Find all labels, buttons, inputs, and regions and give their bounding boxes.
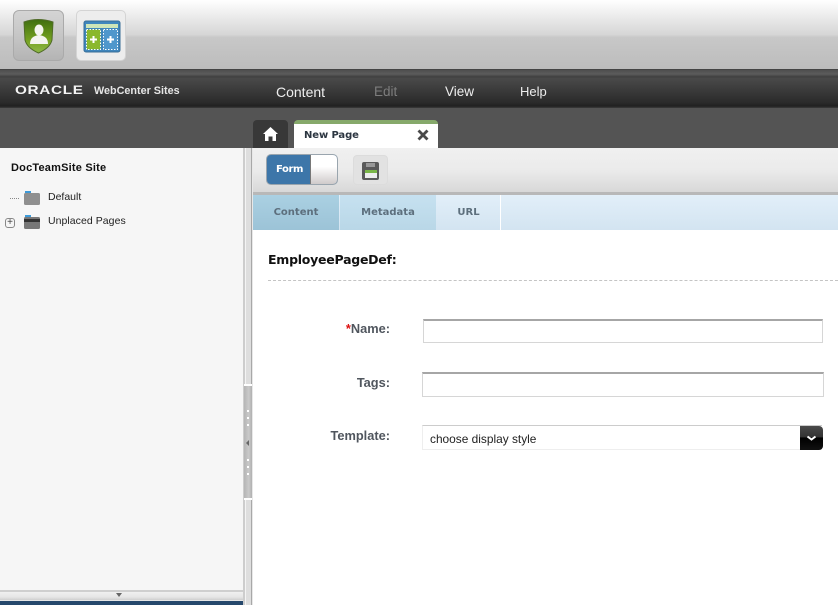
input: Tags (422, 372, 824, 397)
tab: Content: Content (274, 207, 318, 218)
tab bar (253, 192, 838, 231)
label: Template: Template: (330, 428, 390, 443)
icon: user shield button (13, 10, 64, 61)
menu bar (0, 69, 838, 108)
icon: dropdown button (800, 426, 823, 450)
menu: View: View (445, 84, 474, 99)
divider (268, 280, 838, 281)
toggle knob (310, 155, 337, 184)
tree item: Default: Default (48, 191, 81, 203)
tree item: Unplaced Pages (5, 215, 126, 229)
tab title: New Page (304, 130, 359, 141)
logo: Oracle: ORACLE (15, 85, 84, 97)
splitter (243, 148, 253, 605)
tab strip (0, 108, 838, 148)
icon: save button (353, 155, 388, 185)
toggle: Form: Form (276, 164, 303, 175)
tab: Metadata: Metadata (361, 207, 415, 218)
icon: expand (5, 218, 15, 228)
product name: WebCenter Sites (94, 85, 180, 97)
menu: Content: Content (276, 84, 325, 100)
select: Template: choose display style (430, 432, 536, 446)
tree item: Default (10, 191, 82, 205)
icon: expand: + (7, 217, 13, 228)
menu: Edit: Edit (374, 84, 397, 99)
input: Name (423, 319, 823, 343)
tab: URL (437, 195, 501, 230)
select: Template (422, 425, 822, 450)
toggle: Form (266, 154, 338, 185)
tab: Metadata (340, 195, 436, 230)
icon: open folder (24, 215, 40, 229)
site title: DocTeamSite Site (11, 162, 106, 174)
icon: collapse arrow (116, 593, 122, 597)
sidebar footer (0, 590, 244, 605)
icon: home (263, 127, 278, 141)
tab: URL: URL (457, 207, 480, 218)
active tab: New Page (294, 120, 438, 148)
splitter handle (244, 384, 252, 500)
form toolbar (253, 148, 838, 192)
icon: folder (24, 191, 40, 205)
tree item: Unplaced Pages: Unplaced Pages (48, 215, 126, 227)
menu: Help: Help (520, 84, 547, 99)
label: Tags: Tags: (357, 375, 390, 390)
tab: Content (253, 195, 339, 230)
home tab (253, 120, 288, 148)
icon: close (418, 130, 428, 140)
top toolbar (0, 0, 838, 69)
form heading: EmployeePageDef: (268, 252, 396, 267)
label: Name: *Name: (346, 321, 390, 336)
icon: page layout button (76, 10, 126, 61)
left sidebar (0, 148, 244, 605)
